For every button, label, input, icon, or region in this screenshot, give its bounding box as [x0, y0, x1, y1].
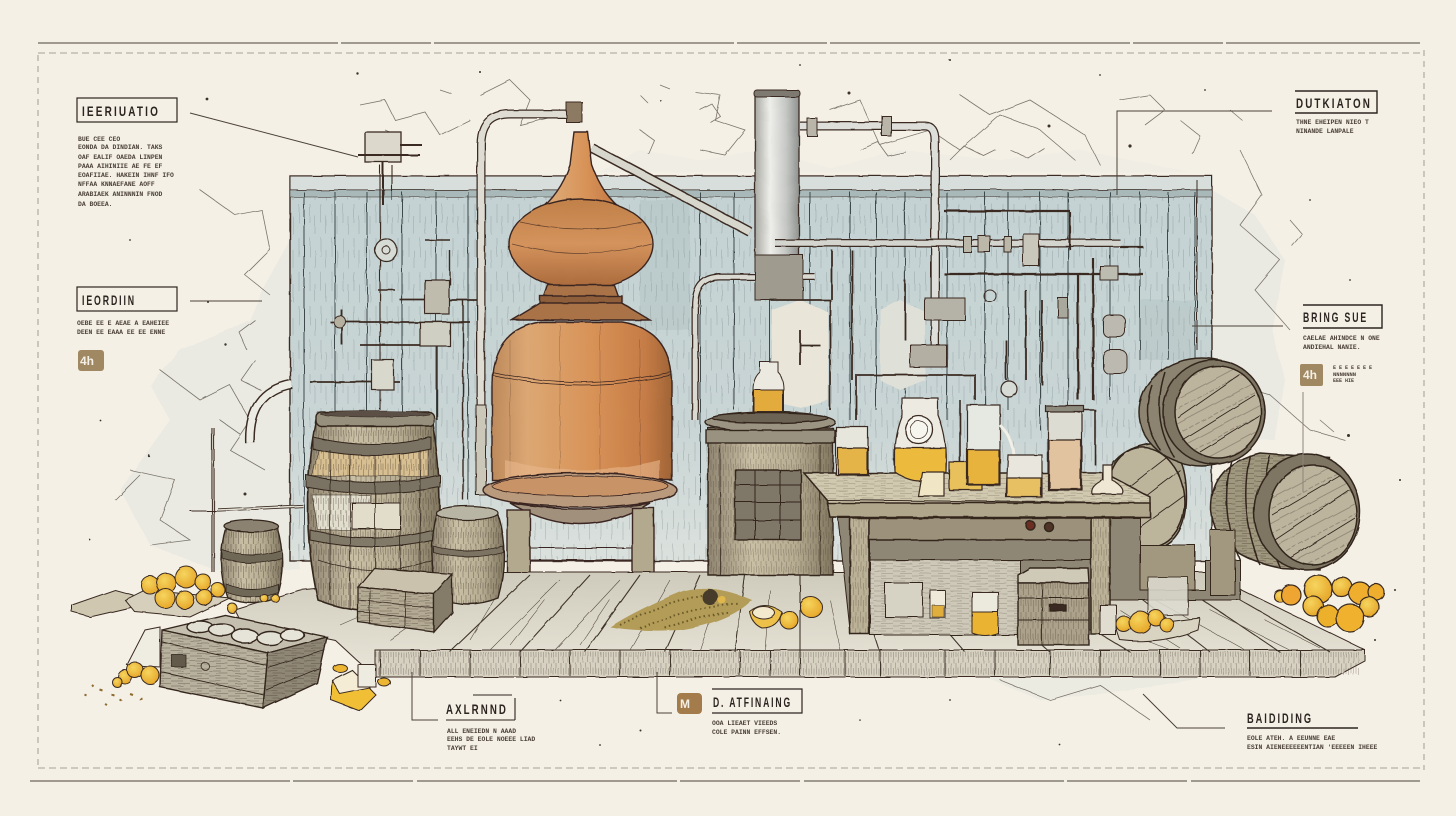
copper still	[483, 132, 677, 608]
round bottom flask	[1092, 465, 1123, 494]
cut fruit on floor	[750, 597, 822, 629]
floor planks	[72, 572, 1365, 677]
label: bottom centre attaining: OOA LIEAET VIEEDS	[712, 720, 777, 727]
label: fermentation top left: PAAA AIHINIIE AE FE EF	[78, 163, 163, 170]
label: bottom centre attaining: D. ATFINAING	[713, 694, 792, 710]
label: bring side right: EEE HIE	[1333, 378, 1354, 384]
label: fermentation top left: NFFAA KNNAEFANE AOFF	[78, 181, 155, 188]
label: fermentation top left: IEERIUATIO	[82, 103, 160, 119]
label: fermentation top left: EOAFIIAE. HAKEIN IHNF IFO	[78, 172, 174, 179]
label: bottom centre attaining	[677, 689, 802, 736]
glass with drink on floor	[972, 592, 998, 636]
large barrel	[306, 411, 440, 615]
barrel beside still	[431, 506, 504, 604]
small beaker	[918, 472, 944, 496]
barrel top	[1139, 358, 1265, 466]
label: fermentation top left: BUE CEE CEO	[78, 136, 120, 143]
icon: brown badge centre: M	[680, 697, 690, 711]
label: bring side right: NNNNNNN	[1333, 371, 1356, 378]
work table	[804, 473, 1150, 634]
label: distillation top right: DUTKIATON	[1296, 95, 1372, 111]
barrel middle stack	[1100, 443, 1186, 550]
label: fermentation top left: EONDA DA DINDIAN. TAKS	[78, 144, 163, 151]
still wooden legs	[507, 510, 530, 608]
leader lines	[190, 111, 1303, 728]
lower centre pipes and gauges	[695, 250, 1095, 465]
icon: brown badge right: 4h	[1303, 368, 1317, 382]
label: distillation top right: NINANDE LANPALE	[1296, 128, 1354, 135]
copper boiler body	[492, 322, 672, 480]
label: fermentation top left: ARABIAEK ANINNNIN FNOD	[78, 191, 163, 198]
label: distillation top right: THNE EHEIPEN NIEO T	[1296, 119, 1369, 126]
big wooden crate of ingredients	[160, 615, 327, 708]
copper still collar	[512, 285, 650, 320]
copper boiler base ring	[483, 473, 677, 507]
label: bring side right	[1300, 305, 1382, 386]
furnace cabinet	[705, 412, 835, 575]
copper still onion head	[509, 199, 653, 289]
label: second left: IEORDIIN	[82, 292, 136, 308]
label: bottom left axlrnnd: ALL ENEIEDN N AAAD	[447, 728, 516, 735]
small barrel left	[221, 520, 282, 603]
grain pile on floor	[610, 588, 752, 631]
label: fermentation top left: OAF EALIF OAEDA LINPEN	[78, 154, 163, 161]
label: bottom left axlrnnd: TAYWT EI	[447, 745, 478, 752]
measuring jug	[1006, 455, 1042, 497]
label: second left: DEEN EE EAAA EE EE ENNE	[77, 329, 165, 336]
swan neck pipe from still	[476, 102, 750, 495]
label: bottom right baididing: ESIN AIENEEEEEENTIAN 'EEEEEN IHEEE	[1247, 744, 1378, 751]
label: second left	[77, 287, 177, 371]
label: bring side right: E E E E E E E	[1333, 365, 1372, 371]
label: bottom centre attaining: COLE PAINN EFFSEN.	[712, 729, 781, 736]
plank wall	[290, 176, 1212, 561]
round flask	[894, 398, 946, 480]
under table crates and fittings	[838, 518, 1240, 635]
jug with handle	[967, 405, 1000, 485]
bowl of fruit and glass right	[1100, 577, 1200, 641]
copper still neck	[537, 132, 625, 212]
label: fermentation top left	[77, 98, 177, 208]
label: distillation top right	[1295, 91, 1377, 135]
glassware on table	[836, 398, 1123, 497]
icon: brown badge left: 4h	[80, 354, 94, 368]
label: bring side right: BRING SUE	[1303, 309, 1368, 325]
yellow cheese block	[331, 664, 390, 711]
label: bottom right baididing	[1247, 710, 1378, 751]
cloth sack and spilled fruit	[112, 627, 160, 687]
label: fermentation top left: DA BOEEA.	[78, 201, 113, 208]
label: bottom right baididing: BAIDIDING	[1247, 710, 1313, 726]
curved spout and stand at left	[190, 384, 303, 572]
glass bottle on furnace	[753, 362, 784, 412]
label: second left: OEBE EE E AEAE A EAHEIEE	[77, 320, 169, 327]
fruit tray left	[125, 566, 279, 617]
wooden crate centre left	[358, 568, 452, 632]
small crate on floor	[1018, 568, 1089, 645]
barrel lower right	[1211, 453, 1330, 570]
stacked barrels at right	[1100, 358, 1360, 570]
label: bring side right: ANDIEHAL NANIE.	[1303, 344, 1361, 351]
glass beaker left	[836, 427, 868, 475]
tall cylinder jar	[1048, 408, 1082, 490]
label: bring side right: CAELAE AHINDCE N ONE	[1303, 335, 1380, 342]
left gauges and pipework on wall	[310, 132, 480, 500]
label: bottom left axlrnnd: EEHS DE EOLE NOEEE LIAD	[447, 736, 535, 743]
hand-drawn illustration	[72, 59, 1401, 746]
steel column and upper pipes	[754, 90, 1143, 400]
spilled grain left	[85, 685, 143, 705]
label: bottom left axlrnnd: AXLRNND	[446, 701, 508, 717]
fruit pile right	[1274, 575, 1384, 632]
label: bottom right baididing: EOLE ATEH. A EEUNNE EAE	[1247, 735, 1335, 742]
watercolor wash and crackle around wall	[89, 59, 1401, 746]
label: bottom left axlrnnd	[446, 695, 535, 752]
